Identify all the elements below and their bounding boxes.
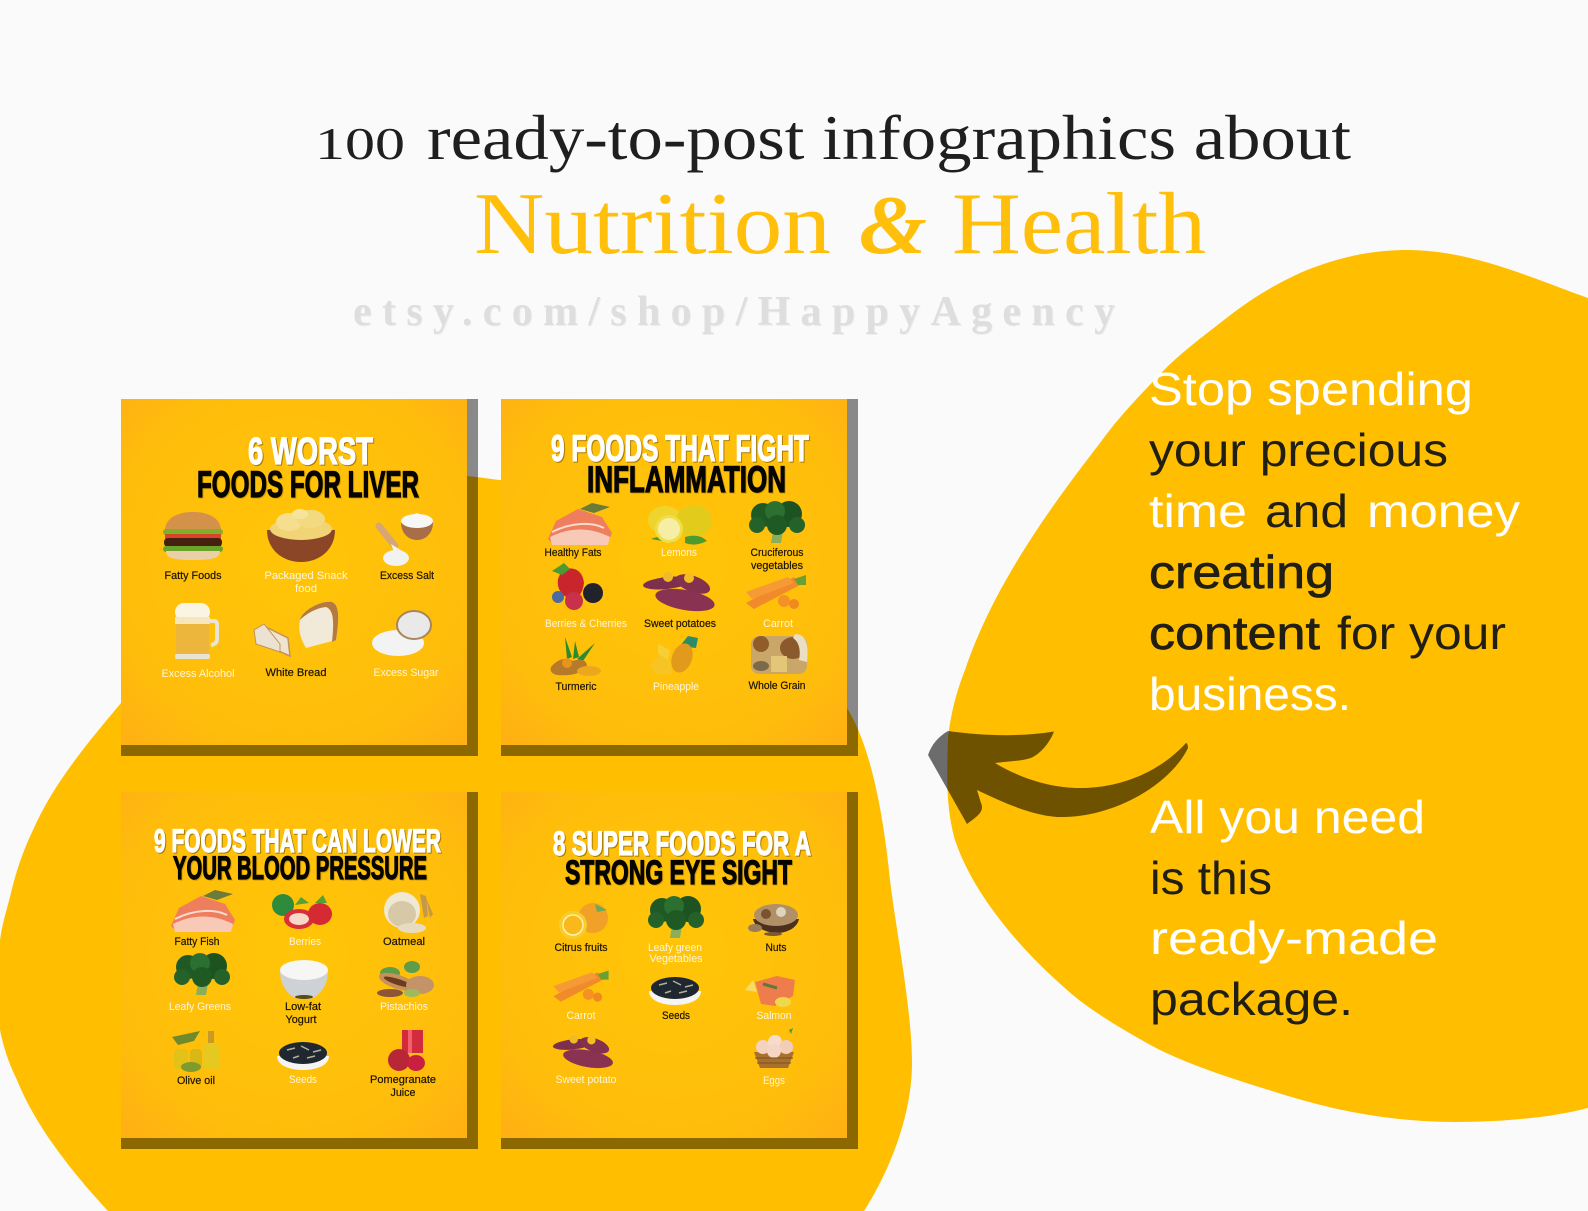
food: Packaged Snack food: food [295, 583, 317, 595]
text block: stop spending: time [1149, 485, 1247, 537]
food: White Bread: White Bread [266, 667, 326, 679]
food: Seeds [277, 1042, 329, 1086]
panel: 8 super foods for a strong eye sight [501, 792, 858, 1149]
food: Pomegranate Juice: Juice [390, 1087, 416, 1099]
food: Carrot: Carrot [763, 618, 793, 630]
card background [501, 792, 847, 1138]
food: Lemons: Lemons [661, 547, 697, 559]
text block: stop spending: your precious [1149, 424, 1448, 476]
text block: stop spending: content [1149, 607, 1320, 659]
food: Fatty Foods: Fatty Foods [164, 570, 222, 582]
text block: stop spending: for your [1337, 607, 1506, 659]
card heading: INFLAMMATION [587, 459, 786, 500]
food: Berries & Cherries: Berries & Cherries [545, 618, 627, 630]
food: Pineapple [650, 636, 699, 693]
card heading: 9 FOODS THAT CAN LOWER [154, 823, 441, 859]
food: Seeds: Seeds [662, 1010, 690, 1022]
food: Low-fat Yogurt: Low-fat [285, 1001, 321, 1013]
text block: stop spending: business. [1149, 668, 1351, 720]
food: Pistachios [377, 961, 434, 1013]
food: Nuts: Nuts [766, 942, 787, 954]
text block: stop spending: Stop spending [1149, 363, 1473, 415]
text block: stop spending: creating [1149, 546, 1334, 598]
food: Olive oil: Olive oil [177, 1075, 215, 1087]
text block: stop spending: and [1265, 485, 1348, 537]
food: Whole Grain [748, 634, 808, 692]
food: Cruciferous vegetables [749, 501, 805, 572]
food: Excess Sugar: Excess Sugar [374, 667, 439, 679]
food: Seeds: Seeds [289, 1074, 317, 1086]
food: Berries: Berries [289, 936, 321, 948]
food: Excess Salt [379, 513, 434, 582]
food: Cruciferous vegetables: Cruciferous [750, 547, 804, 559]
food: Excess Alcohol: Excess Alcohol [162, 668, 234, 680]
food: Pomegranate Juice: Pomegranate [370, 1074, 436, 1086]
blob: right yellow shape [947, 250, 1588, 1122]
food: Citrus fruits: Citrus fruits [554, 942, 608, 954]
heading block [315, 102, 1351, 335]
shop watermark: etsy.com/shop/HappyAgency [353, 289, 1115, 335]
food: Sweet potato: Sweet potato [556, 1074, 616, 1086]
food: White Bread [254, 602, 338, 679]
food: Excess Alcohol [162, 603, 234, 680]
food: Sweet potatoes [643, 570, 716, 630]
card background [501, 399, 847, 745]
arrow: curved pointing left to cards [928, 731, 1188, 824]
food: Low-fat Yogurt [280, 960, 328, 1026]
title line: 100 [315, 118, 405, 169]
text block: all you need: is this [1150, 852, 1272, 904]
food: Pistachios: Pistachios [380, 1001, 428, 1013]
card heading: 8 SUPER FOODS FOR A [553, 825, 811, 863]
food: Oatmeal: Oatmeal [383, 936, 425, 948]
food: Cruciferous vegetables: vegetables [751, 560, 803, 572]
card heading: FOODS FOR LIVER [197, 464, 419, 505]
food: Healthy Fats: Healthy Fats [544, 547, 602, 559]
subject title: Nutrition [474, 176, 831, 273]
food: Eggs: Eggs [763, 1075, 785, 1087]
food: Olive oil [172, 1031, 219, 1087]
food: Carrot: Carrot [566, 1010, 596, 1022]
food: Leafy Greens [169, 953, 231, 1013]
card heading: 9 FOODS THAT FIGHT [551, 428, 809, 469]
card heading: 6 WORST [248, 431, 373, 473]
food: Excess Sugar [372, 611, 439, 679]
card heading [551, 428, 809, 500]
food: Salmon: Salmon [756, 1010, 792, 1022]
panel: 9 foods that fight inflammation [501, 399, 858, 756]
text block: stop spending [1149, 363, 1520, 720]
food: Fatty Fish [171, 890, 235, 948]
food: Leafy Greens: Leafy Greens [169, 1001, 231, 1013]
food: Pineapple: Pineapple [653, 681, 699, 693]
card heading: STRONG EYE SIGHT [565, 854, 792, 892]
food: Turmeric [551, 637, 601, 693]
food: Carrot [553, 970, 609, 1022]
card shadow [501, 399, 858, 756]
blob: left yellow shape [0, 474, 912, 1211]
card shadow [121, 399, 478, 756]
card heading [154, 823, 441, 886]
subject title [474, 176, 1206, 273]
text block: stop spending: money [1367, 485, 1520, 537]
food: Excess Salt: Excess Salt [380, 570, 434, 582]
panel: 9 foods that can lower blood pressure [121, 792, 478, 1149]
food: Salmon [745, 976, 795, 1022]
food: Packaged Snack food: Packaged Snack [264, 570, 348, 582]
food: Berries & Cherries [545, 563, 627, 630]
food: Oatmeal [383, 892, 433, 948]
food: Nuts [748, 904, 799, 954]
card shadow [121, 792, 478, 1149]
food: Berries [272, 894, 332, 948]
card heading [553, 825, 811, 892]
food: Low-fat Yogurt: Yogurt [286, 1014, 316, 1026]
food: Lemons [648, 505, 712, 559]
card heading: YOUR BLOOD PRESSURE [173, 850, 427, 886]
food: Sweet potatoes: Sweet potatoes [644, 618, 716, 630]
subject title: & [859, 179, 927, 272]
panel: 6 worst foods for liver [121, 399, 478, 756]
food: Healthy Fats [544, 503, 612, 559]
title line: ready-to-post infographics about [427, 102, 1351, 173]
text block: all you need [1150, 791, 1438, 1025]
card background [121, 792, 467, 1138]
card background [121, 399, 467, 745]
food: Leafy green Vegetables [648, 896, 704, 965]
food: Turmeric: Turmeric [556, 681, 597, 693]
text block: all you need: package. [1150, 973, 1353, 1025]
food: Citrus fruits [554, 903, 608, 954]
subject title: Health [952, 176, 1206, 273]
food: Packaged Snack food [264, 509, 348, 595]
food: Eggs [754, 1028, 794, 1087]
food: Fatty Foods [163, 512, 223, 582]
food: Carrot [746, 575, 806, 630]
food: Leafy green Vegetables: Vegetables [650, 953, 703, 965]
text block: all you need: All you need [1150, 791, 1425, 843]
food: Seeds [649, 977, 701, 1022]
food: Leafy green Vegetables: Leafy green [648, 942, 702, 954]
card shadow [501, 792, 858, 1149]
food: Pomegranate Juice [370, 1030, 436, 1099]
text block: all you need: ready-made [1150, 912, 1438, 964]
food: Whole Grain: Whole Grain [748, 680, 806, 692]
food: Sweet potato [552, 1034, 616, 1086]
food: Fatty Fish: Fatty Fish [174, 936, 220, 948]
card heading [197, 431, 419, 505]
